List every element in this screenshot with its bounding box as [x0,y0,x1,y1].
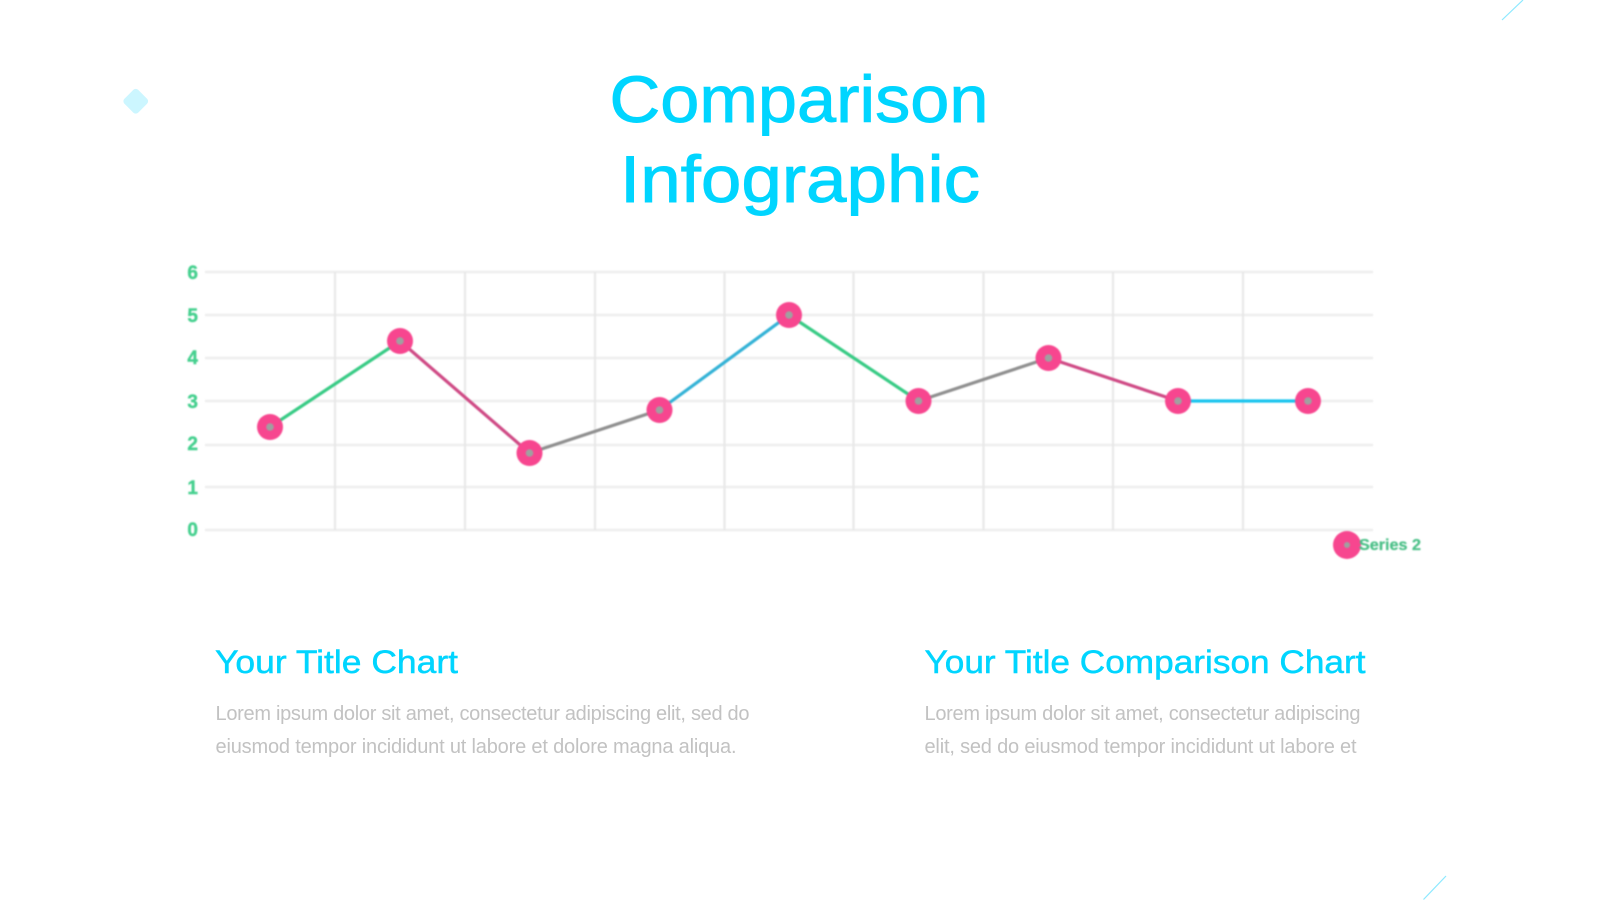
decorative line: bottom right [1424,876,1446,900]
y axis labels: 6 [187,263,198,284]
chart legend: Series 2 [1359,537,1421,554]
chart legend [1333,531,1421,559]
panel: right text block [924,644,1366,758]
chart data markers [257,302,1321,466]
line chart [187,263,1421,559]
right body text: elit, sed do eiusmod tempor incididunt ut labore et [924,736,1357,758]
title [610,62,988,216]
y axis labels: 1 [187,478,198,499]
left heading: Your Title Chart [215,644,458,680]
chart grid [205,272,1373,530]
y axis labels: 0 [187,520,198,541]
y axis labels [187,263,198,541]
right body text [924,703,1360,758]
right heading: Your Title Comparison Chart [924,644,1366,680]
panel: left text block [215,644,750,758]
chart line segments [270,315,1308,453]
y axis labels: 4 [187,348,198,369]
icon: diamond [122,87,150,115]
decorative line: top right [1502,0,1523,20]
y axis labels: 5 [187,306,198,327]
y axis labels: 3 [187,392,198,413]
right body text: Lorem ipsum dolor sit amet, consectetur adipiscing [924,703,1360,725]
left body text: eiusmod tempor incididunt ut labore et dolore magna aliqua. [216,736,736,758]
title: Infographic [620,142,980,216]
left body text [216,703,750,758]
y axis labels: 2 [187,434,198,455]
title: Comparison [610,62,988,136]
left body text: Lorem ipsum dolor sit amet, consectetur adipiscing elit, sed do [216,703,750,725]
